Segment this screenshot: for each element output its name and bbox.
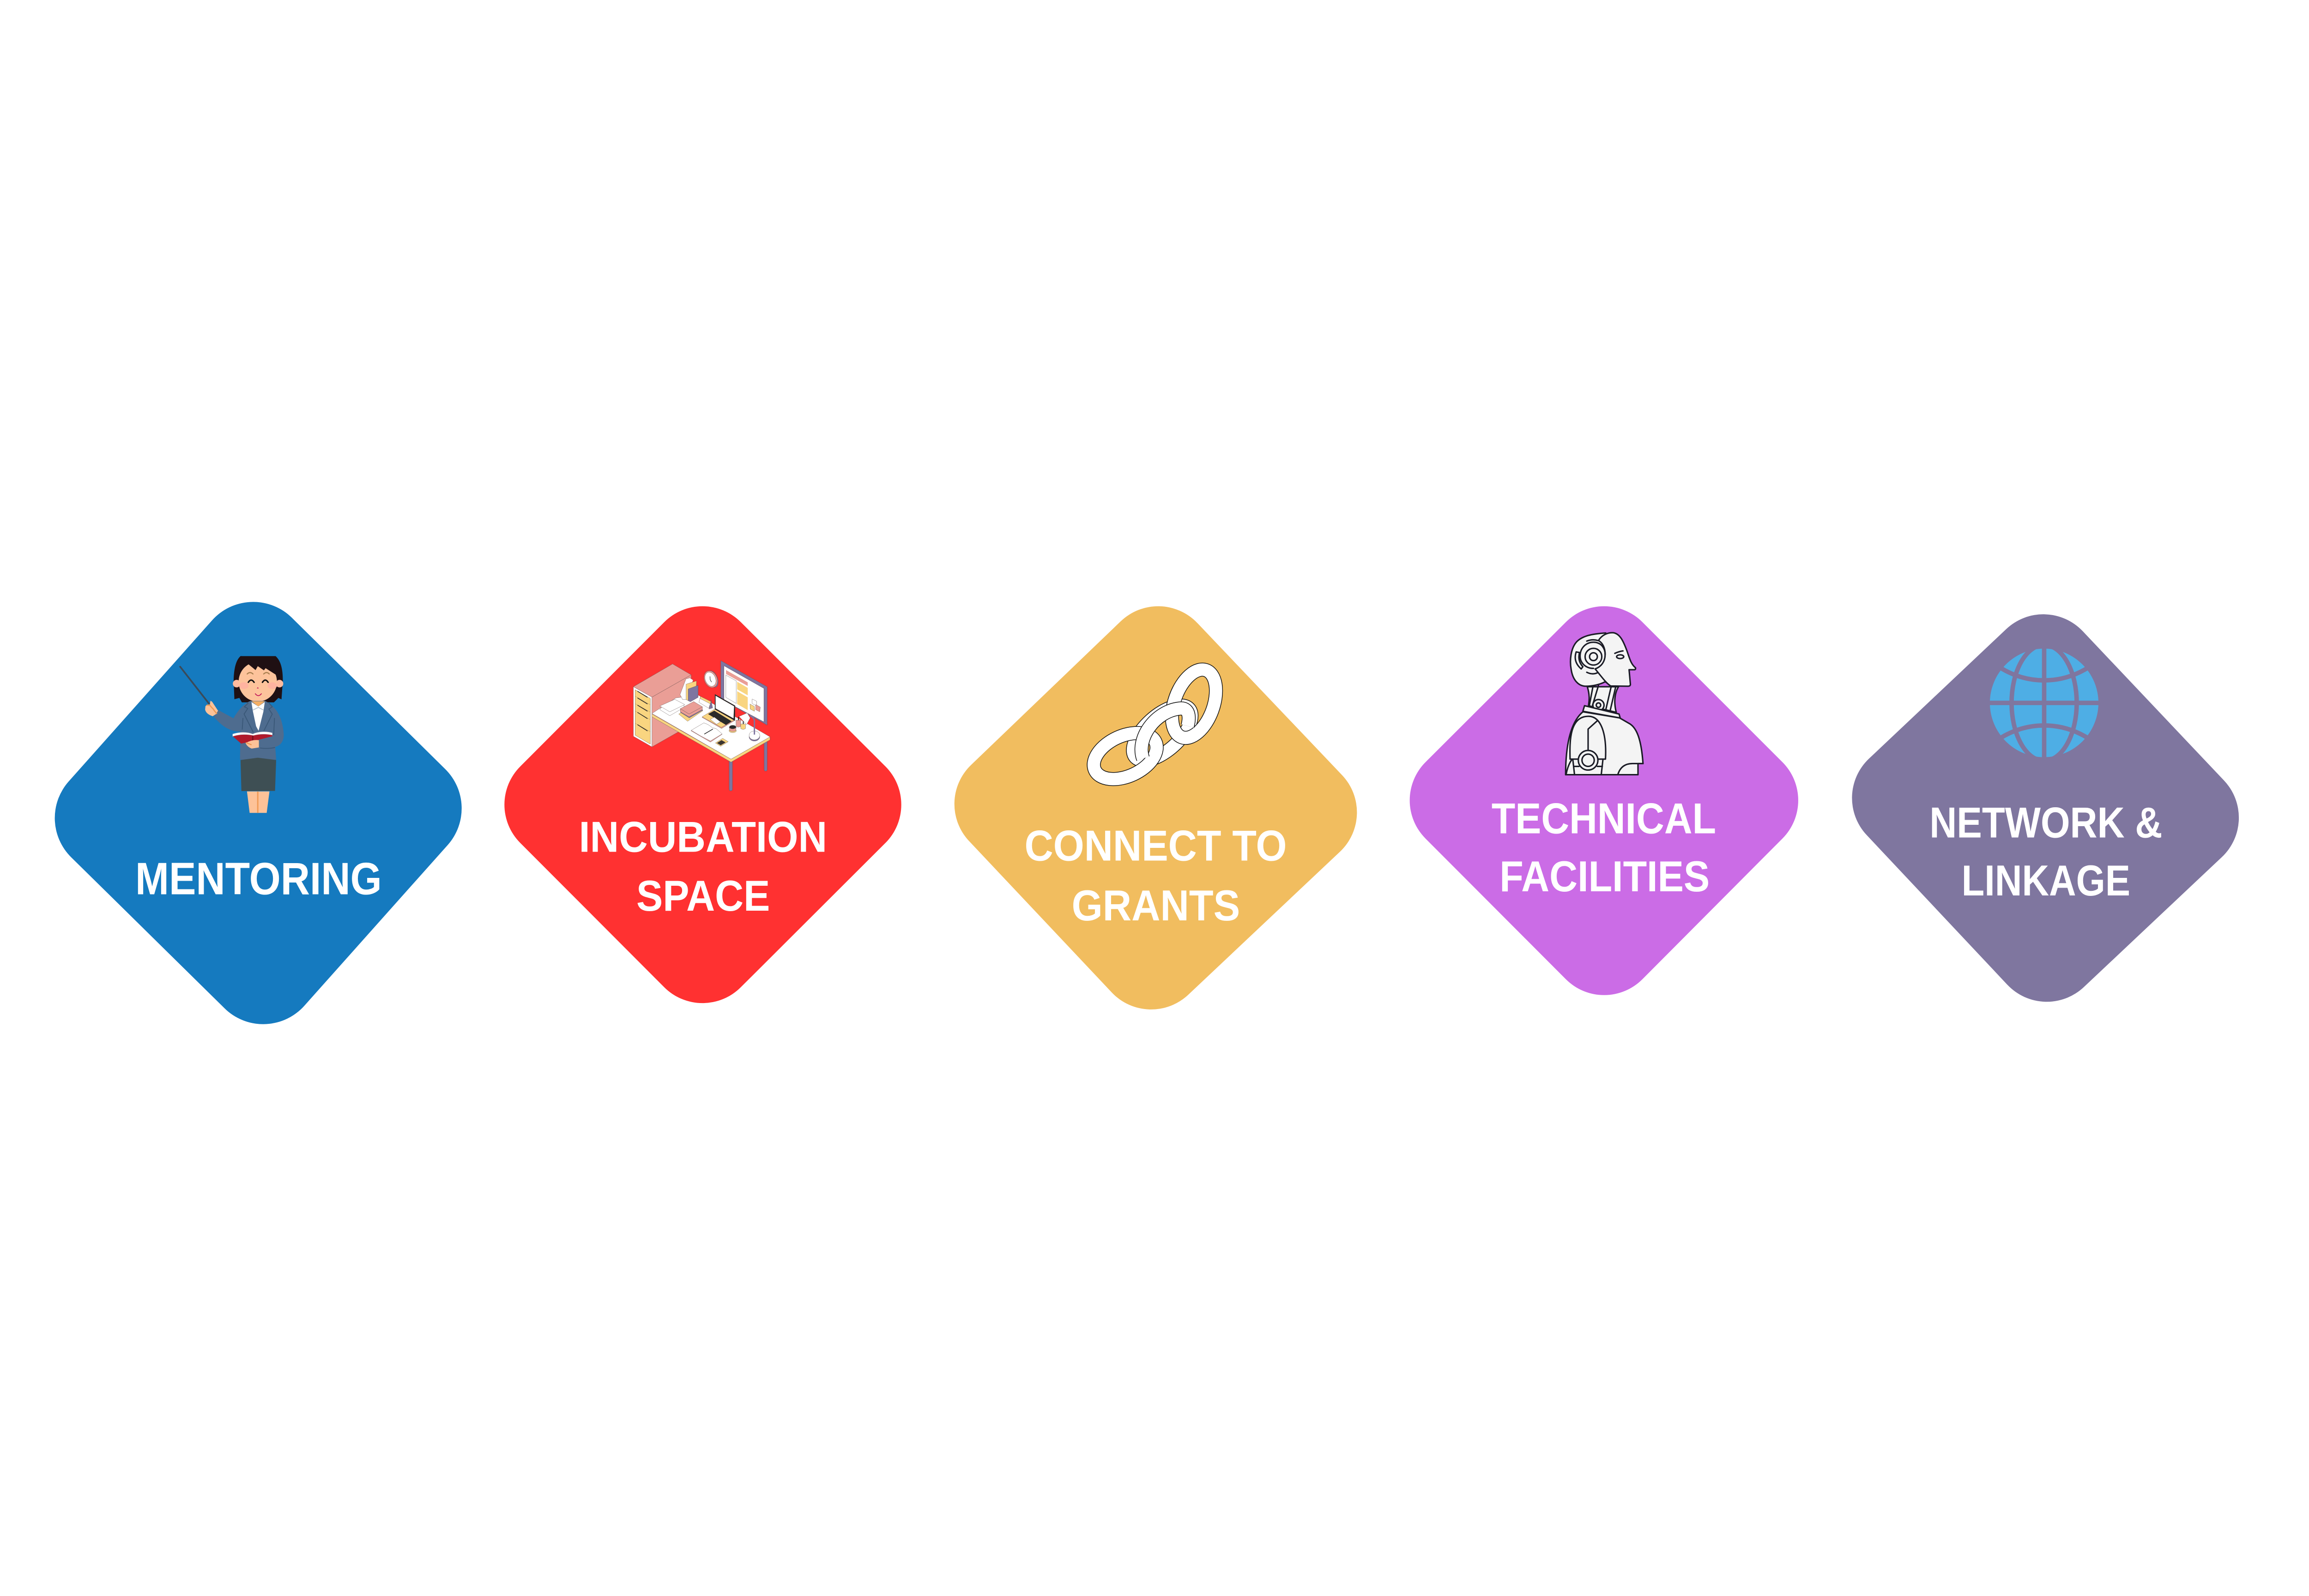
- panel: connect to grants: [1009, 660, 1303, 955]
- label: incubation space: [579, 812, 827, 920]
- panel: network and linkage: [1906, 645, 2185, 948]
- icon: robot profile: [1566, 633, 1643, 775]
- diamond: network and linkage background: [1906, 668, 2185, 948]
- diamond: mentoring background: [110, 657, 406, 969]
- label: technical facilities: TECHNICAL: [1492, 794, 1716, 843]
- label: technical facilities: FACILITIES: [1499, 852, 1710, 901]
- label: connect to grants: [1025, 821, 1287, 930]
- label: mentoring: MENTORING: [135, 853, 382, 904]
- label: network and linkage: NETWORK &: [1929, 798, 2162, 846]
- panel: mentoring: [110, 656, 406, 969]
- panel: incubation space: [558, 660, 847, 949]
- label: incubation space: SPACE: [636, 871, 770, 920]
- label: technical facilities: [1492, 794, 1716, 901]
- icon: globe: [1987, 645, 2101, 761]
- icon: teacher with pointer and book: [180, 656, 284, 813]
- diamond: technical facilities background: [1464, 660, 1744, 941]
- label: network and linkage: LINKAGE: [1962, 856, 2130, 905]
- icon: isometric office desk: [634, 660, 770, 791]
- panel: technical facilities: [1464, 633, 1744, 941]
- label: connect to grants: CONNECT TO: [1025, 821, 1287, 870]
- diamond: incubation background: [558, 660, 847, 949]
- icon: chain links: [1087, 664, 1225, 788]
- label: incubation space: INCUBATION: [579, 812, 827, 861]
- label: network and linkage: [1929, 798, 2162, 905]
- diamond: connect to grants background: [1009, 660, 1303, 955]
- label: connect to grants: GRANTS: [1072, 881, 1240, 930]
